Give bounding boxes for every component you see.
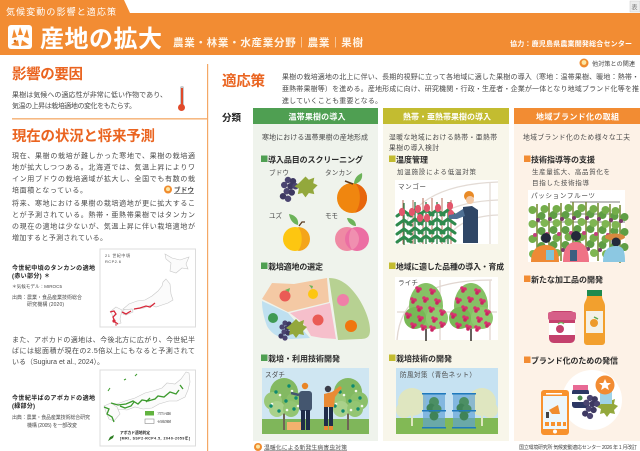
- caption: avocado map: [12, 394, 95, 429]
- text: current situation: [12, 151, 195, 194]
- column header: branding: 地域ブランド化の取組: [536, 112, 619, 122]
- map: avocado suitability: [MRI, SSP2-RCP4.5, 2040-2059年]: [120, 436, 190, 440]
- caption: avocado map: 機構 (2005) を一部改変: [27, 422, 77, 429]
- illustration: lychee: ライチ: [398, 279, 418, 287]
- illustration: passion fruit: [528, 190, 628, 263]
- map: avocado suitability: アボカド適地: [157, 410, 171, 416]
- text: adaptation body: [282, 72, 639, 105]
- text: future projection: 増加すると予測されている。: [12, 233, 107, 242]
- text: guidance: 目指した技術指導: [532, 178, 590, 187]
- figure: greenhouse farmer: [449, 191, 478, 243]
- fruit illustrations: ユズ: [269, 211, 282, 220]
- text: future projection: 将来、寒地における果樹の栽培適地が更に拡大するこ: [12, 198, 195, 208]
- illustration: passion fruit: パッションフルーツ: [531, 192, 595, 200]
- caption: tankan map: ＊気候モデル：MIROC5: [12, 283, 62, 290]
- map: tankan suitability: [100, 249, 196, 327]
- link: grape: [164, 185, 194, 194]
- map: avocado suitability: その他の地域: [157, 418, 171, 424]
- text: current situation: 培面積となっている。: [12, 186, 87, 194]
- link: other measures: 他対策との関連: [592, 60, 635, 68]
- header band: [0, 0, 640, 55]
- icon: top right table button: 表: [632, 4, 638, 12]
- link: grape: ブドウ: [174, 185, 194, 194]
- credit: 協力：鹿児島県農業開発総合センター: [510, 39, 632, 48]
- figure: orange farmer: [531, 233, 559, 262]
- icon: jam jar: [548, 311, 576, 343]
- panel: factors of impact: [12, 65, 185, 111]
- text: avocado paragraph: ばには総面積が現在の2.5倍以上にもなると予測されて: [12, 346, 195, 355]
- icon: brand promotion: [541, 370, 622, 435]
- icon: top right table button: [630, 1, 640, 12]
- icon: small jam jar: [572, 385, 589, 408]
- illustration: windbreak net: 防風対策（青色ネット）: [400, 370, 476, 379]
- icon: yuzu: [283, 214, 310, 251]
- fruit illustrations: モモ: [325, 212, 338, 220]
- footer credit: 国立環境研究所 気候変動適応センター 2026 年 1 月改訂: [519, 444, 637, 451]
- column header: temperate: 温帯果樹の導入: [288, 112, 346, 122]
- text: current situation: 地が拡大しつつある。北海道では、気温上昇によりワ: [12, 162, 195, 172]
- subheading: processed goods: 新たな加工品の開発: [531, 274, 603, 284]
- text: heating: 加温施設による低温対策: [397, 167, 476, 176]
- text: future projection: の現在の適地は少ないが、気温上昇に伴い栽培適地が: [12, 222, 195, 230]
- illustration: windbreak net: [396, 368, 498, 434]
- figure: pink farmer: [563, 231, 589, 262]
- icon: tankan: [337, 173, 367, 213]
- column header: tropical: [383, 108, 509, 124]
- caption: tankan map: 出典：農業・食品産業技術総合: [12, 294, 82, 301]
- text: tropical intro: 果樹の導入検討: [389, 143, 439, 152]
- sector subtitle: 農業・林業・水産業分野｜農業｜果樹: [173, 36, 364, 49]
- panel: regional branding: [514, 108, 640, 441]
- link: other measures: [580, 58, 635, 68]
- column header: temperate: [253, 108, 378, 124]
- text: avocado paragraph: また、アボカドの適地は、今後北方に広がり、今世紀半: [12, 335, 195, 344]
- text: future projection: [12, 198, 195, 242]
- caption: avocado map: 今世紀半ばのアボカドの適地: [12, 394, 95, 402]
- panel: tropical fruit: [383, 108, 509, 441]
- illustration: lychee: [395, 277, 498, 341]
- text: current situation: 現在、果樹の栽培が難しかった寒地で、果樹の栽培適: [12, 151, 195, 160]
- caption: tankan map: (赤い部分) ＊: [12, 272, 50, 280]
- caption: avocado map: 出典：農業・食品産業技術総合研究: [12, 414, 90, 421]
- heading: adaptation: 適応策: [222, 72, 266, 90]
- text: current situation: イン用ブドウの栽培適域が拡大し、全国でも有数の栽: [12, 174, 195, 183]
- subheading: screening: 導入品目のスクリーニング: [268, 154, 363, 164]
- icon: thermometer: [178, 86, 185, 111]
- figure: farmer with hat: [603, 234, 625, 262]
- map: tankan suitability: RCP2.6: [105, 259, 122, 264]
- icon: orchard fruit badge: [8, 25, 32, 49]
- panel: adaptation intro: [222, 58, 639, 124]
- text: branding intro: 地域ブランド化のため様々な工夫: [523, 132, 630, 142]
- subheading: cultivation development: 栽培技術の開発: [396, 354, 452, 364]
- text: tropical intro: 湿暖な地域における熱帯・亜熱帯: [389, 132, 497, 142]
- figure: male farmer: [291, 383, 312, 430]
- icon: grape: [280, 176, 318, 202]
- caption: tankan map: 今世紀中頃のタンカンの適地: [12, 264, 95, 272]
- text: guidance: 生産量拡大、高品質化を: [532, 167, 610, 176]
- map: tankan suitability: 21 世紀中頃: [105, 252, 130, 258]
- illustration: sudachi orchard: スダチ: [265, 370, 285, 379]
- subheading: cultivation technology: 栽培・利用技術開発: [268, 354, 340, 364]
- text: tropical intro: [389, 132, 497, 152]
- icon: juice bottle: [584, 290, 605, 345]
- icon: peach: [335, 218, 369, 251]
- text: future projection: とが予測されている。熱帯・亜熱帯果樹ではタンカン: [12, 210, 195, 219]
- header tab label: 気候変動の影響と適応策: [6, 6, 116, 17]
- text: adaptation body: 亜熱帯果樹等）を進める。産地形成に向け、研究機関・行政・生産者・企業が一体となり地域ブランド化等を推: [282, 84, 639, 93]
- text: adaptation body: 果樹の栽培適地の北上に伴い、長期的視野に立って各地域に適した果樹の導入（寒地：温帯果樹、暖地：熱帯・: [282, 72, 639, 81]
- text: factors body: 果樹は気候への適応性が非常に低い作物であり、: [12, 90, 167, 99]
- text: adaptation body: 進していくことも重要となる。: [282, 96, 382, 105]
- column divider: [207, 64, 208, 451]
- fruit illustrations: タンカン: [325, 168, 352, 177]
- text: guidance: [532, 167, 610, 187]
- column header: tropical: 熱帯・亜熱帯果樹の導入: [403, 112, 491, 122]
- icon: smartphone: [541, 390, 569, 435]
- subheading: temperature management: 温度管理: [396, 154, 428, 164]
- label: classification: 分類: [222, 112, 241, 124]
- text: temperate intro: 寒地における温帯果樹の産地形成: [262, 132, 368, 142]
- caption: tankan map: 研究機構 (2020): [27, 301, 64, 308]
- subheading: technical guidance: 技術指導等の支援: [531, 154, 595, 164]
- fruit illustrations: ブドウ: [269, 168, 289, 177]
- illustration: sudachi orchard: [262, 368, 369, 434]
- panel: temperate fruit: [253, 108, 378, 441]
- heading: factors: 影響の要因: [12, 65, 83, 83]
- link: new pests: [254, 443, 347, 451]
- illustration: mango greenhouse: マンゴー: [398, 182, 426, 191]
- fruit illustrations: [269, 168, 369, 251]
- map: avocado suitability: アボカド適地判定: [120, 430, 150, 435]
- illustration: mango greenhouse: [395, 180, 498, 245]
- subheading: varieties: 地域に適した品種の導入・育成: [396, 262, 504, 272]
- subheading: site selection: 栽培適地の選定: [268, 262, 323, 272]
- subheading: communication: ブランド化のための発信: [531, 356, 618, 366]
- text: avocado paragraph: いる（Sugiura et al., 2024）。: [12, 358, 104, 366]
- zoning map: [262, 278, 370, 341]
- heading: current and future: 現在の状況と将来予測: [12, 127, 155, 145]
- panel: current and future: [12, 127, 196, 446]
- map: avocado suitability: [100, 370, 196, 446]
- column header: branding: [514, 108, 640, 124]
- caption: tankan map: [12, 264, 95, 308]
- caption: avocado map: (緑部分): [12, 402, 35, 410]
- main title: 産地の拡大: [40, 26, 162, 53]
- text: factors body: [12, 90, 167, 110]
- icon: star medal: [596, 376, 614, 404]
- text: avocado paragraph: [12, 335, 195, 366]
- text: factors body: 気温の上昇は栽培適地の変化をもたらす。: [12, 101, 136, 110]
- figure: female farmer: [324, 386, 342, 430]
